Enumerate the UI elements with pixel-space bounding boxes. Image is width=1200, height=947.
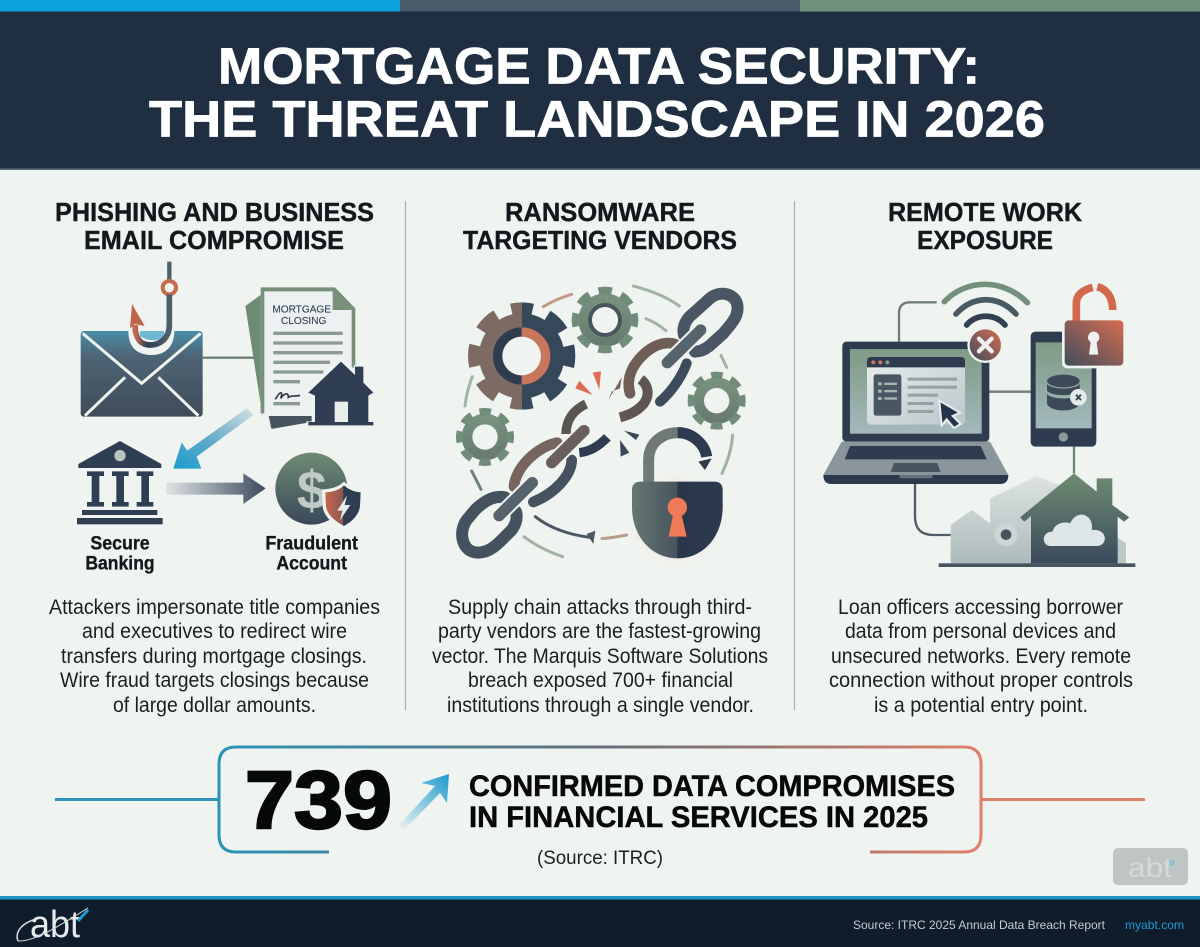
- callout frame: [219, 747, 981, 852]
- heading: phishing: PHISHING AND BUSINESS: [55, 197, 374, 227]
- big number: 739: [245, 755, 392, 846]
- body text: ransomware: vector. The Marquis Software Solutions: [432, 644, 768, 668]
- title: THE THREAT LANDSCAPE IN 2026: [149, 90, 1045, 148]
- icon: gear left: [460, 412, 510, 462]
- column dividers: [404, 201, 406, 710]
- title: MORTGAGE DATA SECURITY:: [218, 38, 980, 94]
- body text: ransomware: breach exposed 700+ financial: [468, 668, 733, 692]
- body text: remote work: connection without proper controls: [829, 668, 1133, 692]
- body text: phishing: Wire fraud targets closings because: [60, 668, 369, 692]
- icon: up arrow: [398, 774, 449, 830]
- icon: fishing hook: [130, 262, 176, 345]
- body text: remote work: [829, 595, 1133, 717]
- heading: remote work: REMOTE WORK: [888, 197, 1082, 227]
- icon: background houses: [951, 476, 1126, 563]
- illustration: broken supply chain: [460, 286, 742, 570]
- labels: secure banking / fraudulent account: Secure: [90, 534, 150, 555]
- icon: dollar coin with shield: [275, 453, 364, 529]
- icon: gear top: [576, 291, 634, 349]
- connector lines: [899, 302, 1074, 535]
- heading: ransomware: RANSOMWARE: [505, 197, 695, 227]
- heading: ransomware: TARGETING VENDORS: [463, 225, 737, 255]
- body text: phishing: of large dollar amounts.: [113, 693, 316, 717]
- panel: phishing: [49, 197, 380, 717]
- watermark logo: [1113, 848, 1188, 885]
- icon: mortgage closing document: CLOSING: [281, 316, 326, 327]
- labels: secure banking / fraudulent account: Fraudulent: [265, 534, 359, 555]
- callout text: CONFIRMED DATA COMPROMISES: [469, 770, 955, 803]
- icon: dollar coin with shield: $: [297, 461, 326, 520]
- arrow: blue diagonal: [173, 408, 253, 469]
- header banner: [0, 12, 1200, 170]
- icon: wifi: [944, 284, 1027, 325]
- body text: phishing: Attackers impersonate title companies: [49, 595, 380, 619]
- callout text: [469, 770, 955, 834]
- labels: secure banking / fraudulent account: [85, 534, 359, 575]
- heading: phishing: [55, 197, 374, 255]
- icon: envelope: [81, 331, 203, 417]
- icon: mortgage closing document: MORTGAGE: [272, 305, 331, 316]
- footer logo: abt: [30, 904, 80, 946]
- labels: secure banking / fraudulent account: Account: [276, 554, 348, 575]
- callout text: IN FINANCIAL SERVICES IN 2025: [469, 801, 928, 834]
- source note: (Source: ITRC): [537, 848, 663, 869]
- icon: laptop: [823, 342, 1008, 484]
- body text: phishing: [49, 595, 380, 717]
- heading: remote work: EXPOSURE: [917, 225, 1053, 255]
- body text: remote work: data from personal devices and: [845, 619, 1116, 643]
- icon: broken chain: [462, 294, 738, 553]
- body text: phishing: transfers during mortgage closings.: [61, 644, 367, 668]
- icon: phone: [1031, 332, 1096, 447]
- heading: remote work: [888, 197, 1082, 255]
- icon: large gear: [474, 309, 569, 403]
- panel: ransomware: [432, 197, 768, 717]
- footer: [0, 896, 1200, 947]
- body text: ransomware: party vendors are the fastest-growing: [438, 619, 761, 643]
- heading: phishing: EMAIL COMPROMISE: [84, 225, 344, 255]
- arrow: to fraudulent account: [166, 473, 266, 504]
- side lines: [55, 798, 1145, 801]
- watermark logo: abt: [1128, 852, 1172, 883]
- icon: wifi blocked x: [967, 327, 1003, 363]
- dashed orbit arcs: [465, 286, 733, 557]
- body text: ransomware: [432, 595, 768, 717]
- arrowhead on orbit: [587, 531, 595, 544]
- icon: home with cloud: [939, 473, 1135, 567]
- heading: ransomware: [463, 197, 737, 255]
- icon: network node: [995, 523, 1017, 546]
- top colour strip: [0, 0, 1200, 12]
- icon: gear right: [691, 375, 742, 426]
- icon: open padlock: [627, 433, 727, 570]
- body text: remote work: Loan officers accessing borrower: [838, 595, 1123, 619]
- icon: open red padlock: [1062, 287, 1126, 368]
- illustration: wire fraud flow: [77, 262, 377, 575]
- panel: remote work: [823, 197, 1135, 717]
- body text: ransomware: Supply chain attacks through third-: [448, 595, 752, 619]
- title: [149, 38, 1045, 148]
- icon: mortgage closing document: [245, 287, 355, 429]
- body text: remote work: unsecured networks. Every remote: [831, 644, 1131, 668]
- icon: break sparks: [575, 371, 639, 457]
- body text: remote work: is a potential entry point.: [874, 693, 1088, 717]
- footer url: myabt.com: [1125, 918, 1184, 932]
- body text: phishing: and executives to redirect wire: [82, 619, 347, 643]
- icon: house: [305, 358, 377, 425]
- icon: bank: [77, 441, 163, 524]
- illustration: remote setup: [823, 284, 1135, 567]
- labels: secure banking / fraudulent account: Banking: [85, 554, 155, 575]
- callout: 739 statistic: [55, 747, 1145, 869]
- footer source: Source: ITRC 2025 Annual Data Breach Report: [853, 918, 1106, 932]
- body text: ransomware: institutions through a single vendor.: [447, 693, 754, 717]
- connector: [203, 354, 257, 361]
